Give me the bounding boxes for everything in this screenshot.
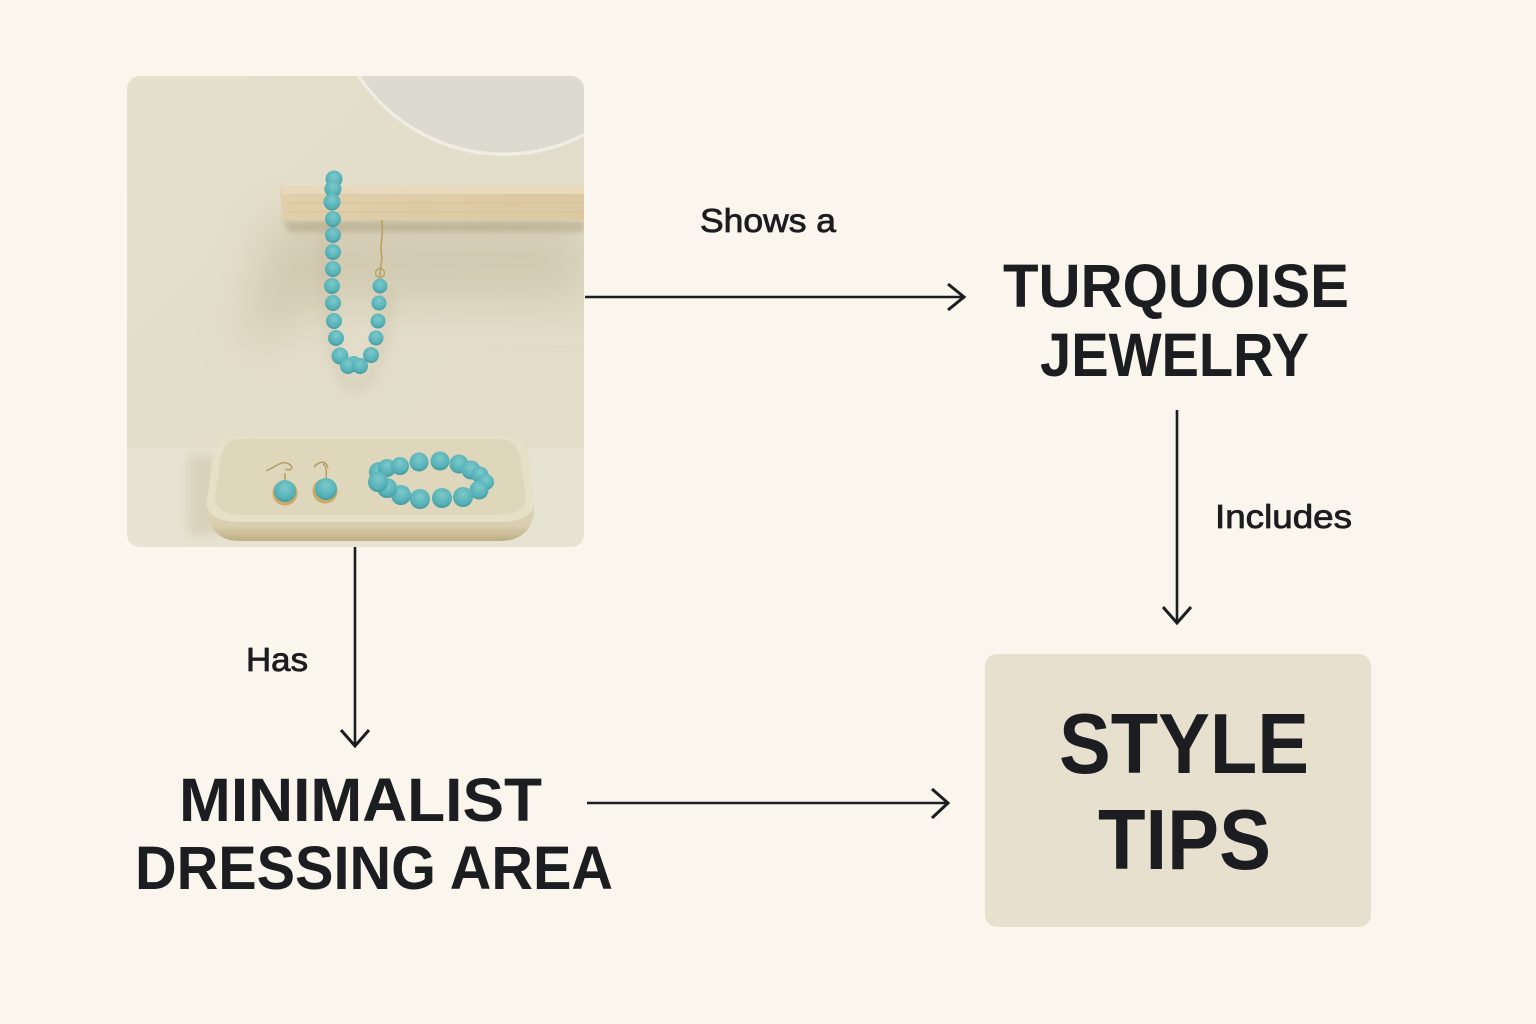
arrow: photo to minimalist dressing area <box>341 547 369 746</box>
label: Shows a: Shows a <box>700 202 837 239</box>
icon: earrings <box>266 462 338 506</box>
arrow: turquoise jewelry to style tips <box>1163 410 1191 623</box>
icon: turquoise beaded necklace <box>324 170 388 374</box>
necklace shadow <box>325 304 389 389</box>
label: Includes: Includes <box>1215 498 1352 535</box>
heading: style tips: STYLE <box>1059 697 1309 792</box>
heading: style tips: TIPS <box>1098 793 1271 888</box>
heading: turquoise jewelry: JEWELRY <box>1040 321 1309 389</box>
heading: style tips <box>1059 697 1309 888</box>
heading: minimalist dressing area: MINIMALIST <box>179 766 542 834</box>
icon: turquoise bracelet <box>368 452 494 509</box>
heading: turquoise jewelry: TURQUOISE <box>1003 252 1349 320</box>
tray shadow <box>188 455 218 535</box>
panel: dressing area photo <box>127 76 584 547</box>
arrow: photo to turquoise jewelry <box>585 284 964 310</box>
shelf shadow on wall <box>240 222 584 350</box>
icon: ceramic tray <box>207 436 534 541</box>
arrow: minimalist dressing area to style tips <box>587 789 948 818</box>
icon: wooden shelf <box>280 186 584 220</box>
heading: minimalist dressing area <box>135 766 613 902</box>
heading: minimalist dressing area: DRESSING AREA <box>135 834 613 902</box>
table surface <box>127 448 584 547</box>
icon: round mirror <box>357 76 584 156</box>
panel: style tips <box>985 654 1371 927</box>
label: Has: Has <box>246 641 308 678</box>
heading: turquoise jewelry <box>1003 252 1349 389</box>
